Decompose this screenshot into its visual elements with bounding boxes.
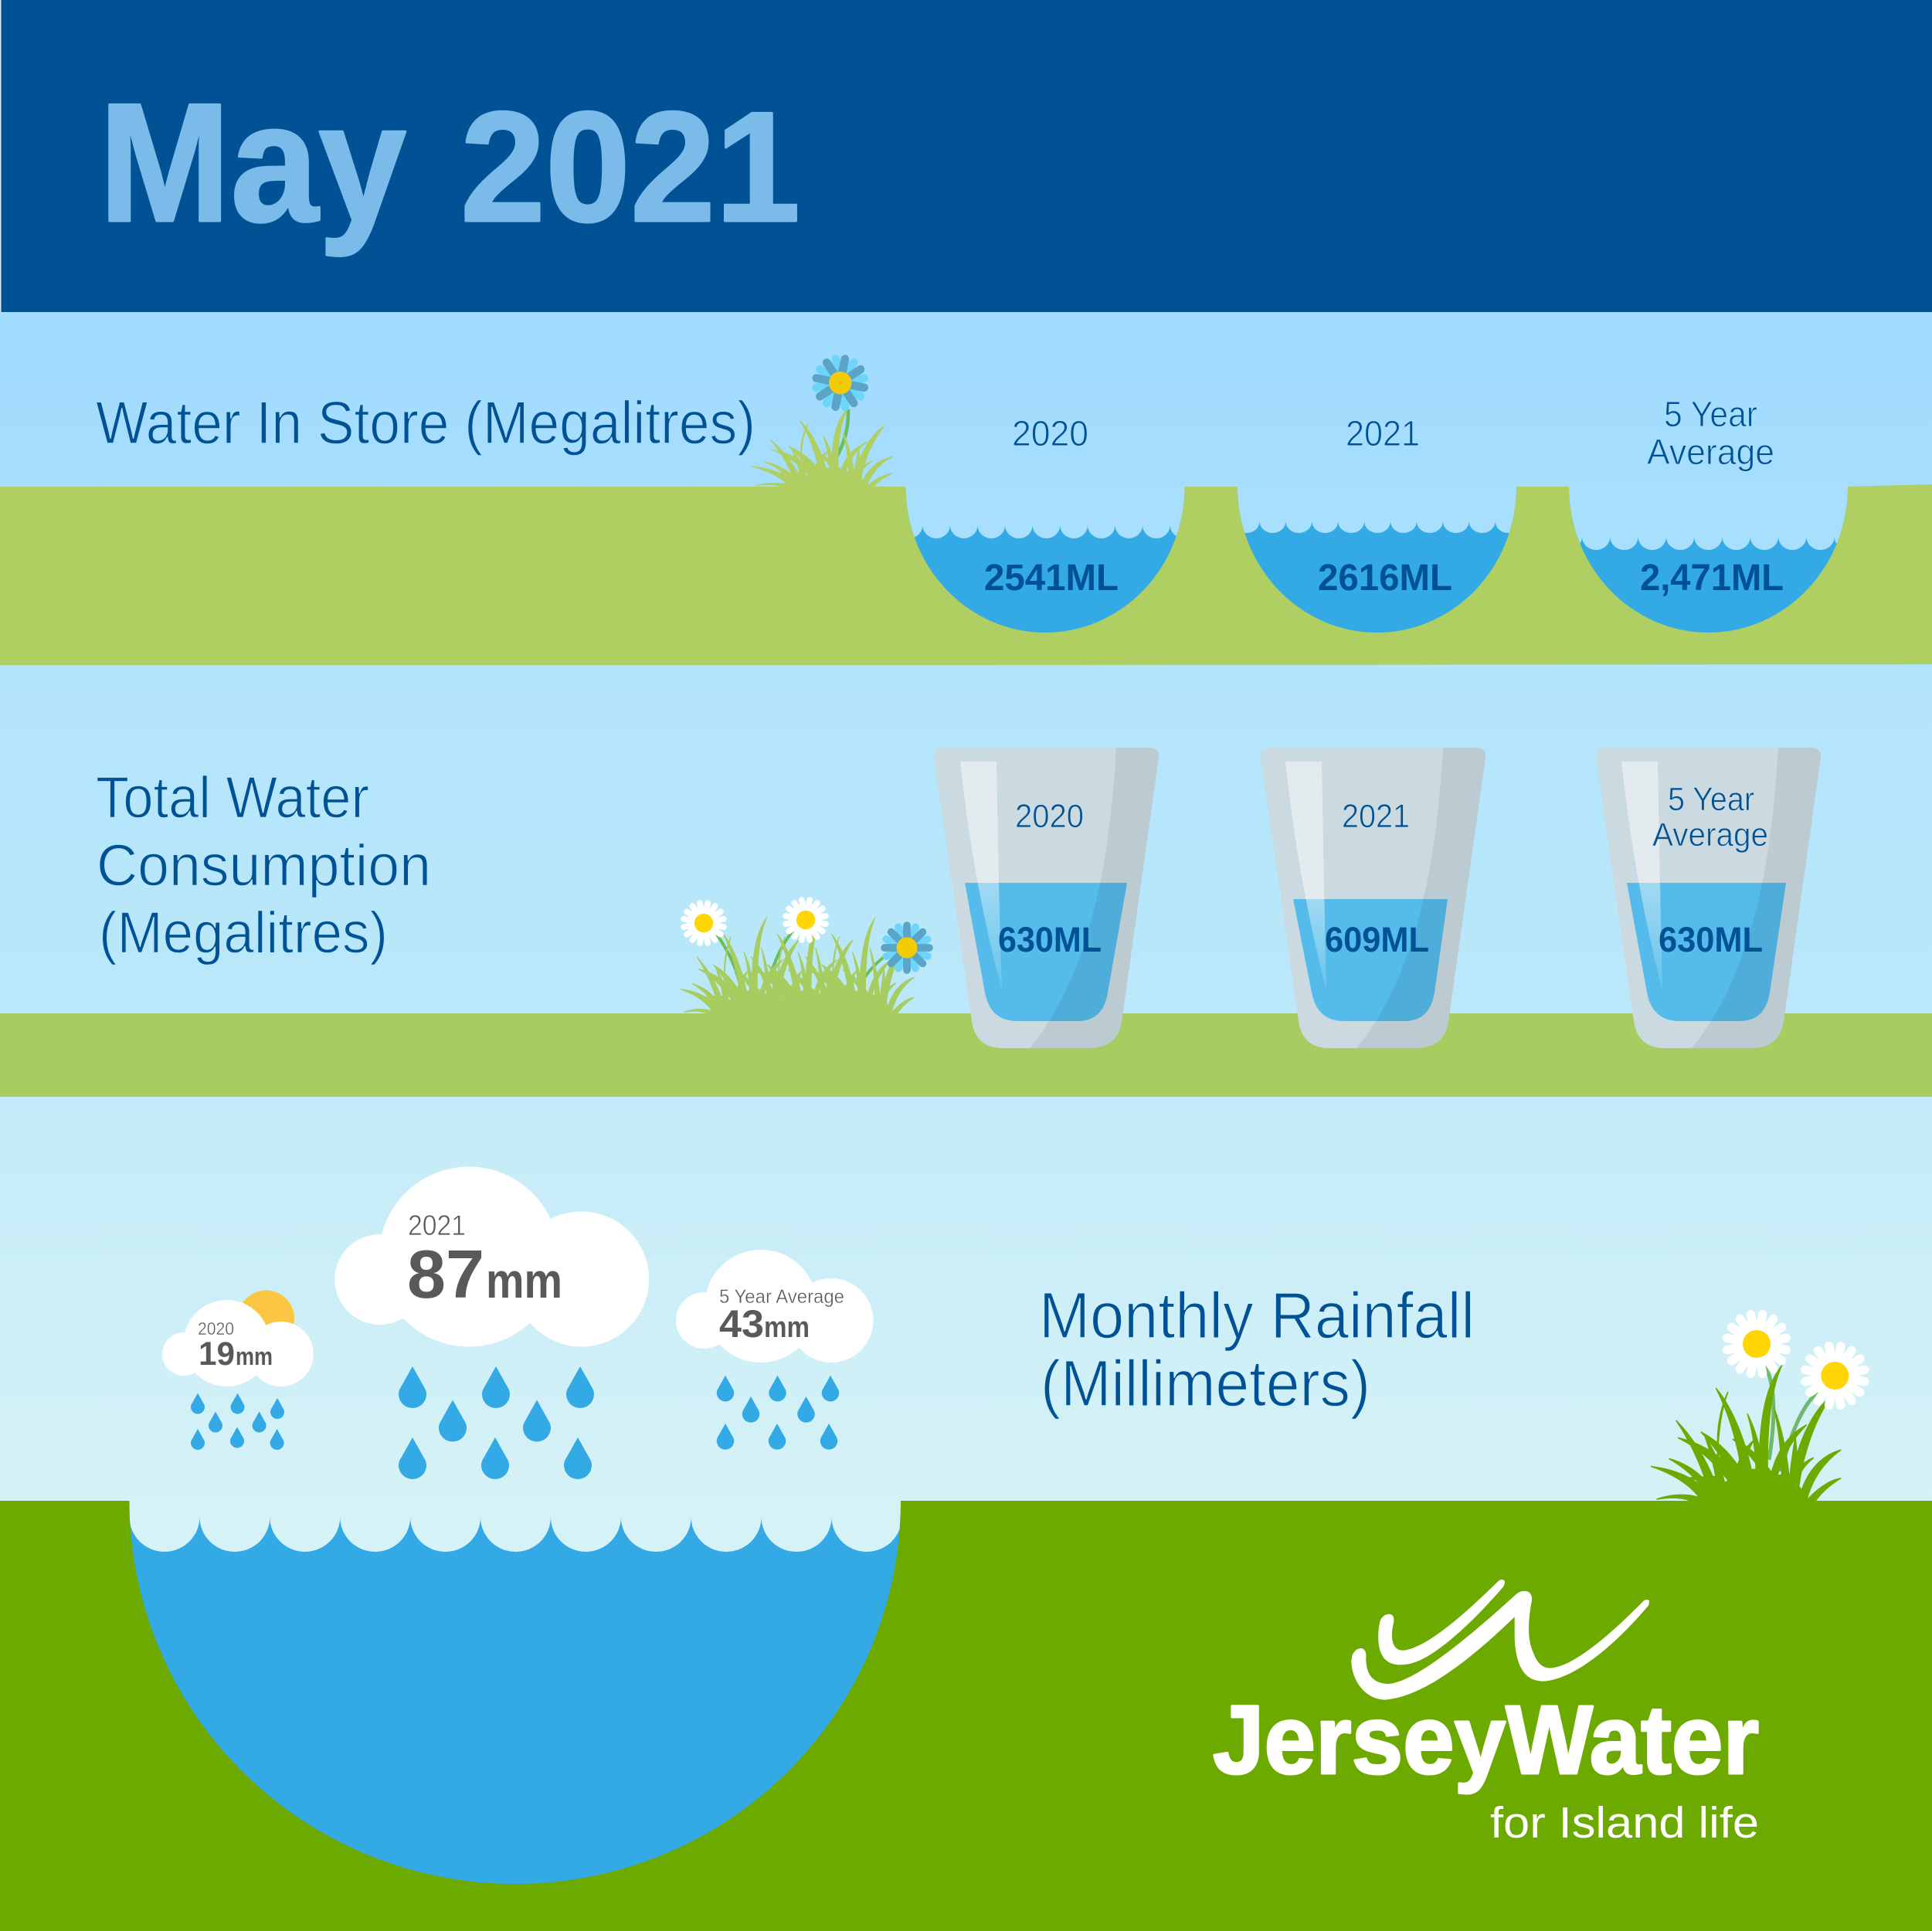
- rain drops 5 year average: [717, 1376, 839, 1450]
- panel: header: [0, 0, 1932, 312]
- glass 5 year average: [1596, 748, 1821, 1048]
- title: 2021: [460, 80, 800, 255]
- panel: total water consumption: [0, 665, 1932, 1098]
- reservoir 5 year average: Average: [1647, 432, 1774, 472]
- sky band: [0, 1097, 1932, 1502]
- reservoir 2021: [1238, 421, 1516, 633]
- glass 2021: 2021: [1342, 798, 1410, 835]
- ground: [0, 1501, 1932, 1931]
- heading: total water consumption: [96, 765, 431, 966]
- heading: monthly rainfall: (Millimeters): [1041, 1347, 1370, 1420]
- title: [99, 69, 800, 257]
- ground: [0, 1013, 1932, 1097]
- glass 2020: 2020: [1015, 798, 1084, 835]
- panel: monthly rainfall: [0, 1097, 1932, 1931]
- glass 2020: 630ML: [998, 920, 1102, 959]
- heading: monthly rainfall: Monthly Rainfall: [1039, 1279, 1475, 1352]
- heading: water in store: Water In Store (Megalitres): [96, 389, 755, 456]
- flowers and grass: [681, 900, 932, 1013]
- rain drops 2020: [191, 1393, 284, 1450]
- reservoir 2020: [905, 421, 1185, 633]
- icon: sun: [238, 1290, 294, 1347]
- reservoir 5 year average: [1569, 402, 1848, 633]
- wordmark: JerseyWater: [1213, 1685, 1759, 1794]
- reservoir: [130, 1501, 901, 1885]
- glass 5 year average: Average: [1652, 816, 1768, 854]
- cloud 5 year average: 43: [719, 1302, 764, 1346]
- cloud 5 year average: [676, 1250, 873, 1363]
- cloud 2020 with sun: [162, 1290, 314, 1386]
- reservoir 2020: 2541ML: [984, 558, 1119, 599]
- reservoir 2021: 2616ML: [1318, 558, 1452, 599]
- ground: [0, 484, 1932, 666]
- cloud 2021: 2021: [408, 1210, 466, 1241]
- glass 5 year average: 630ML: [1659, 920, 1763, 959]
- cloud 2020 with sun: 2020: [198, 1318, 234, 1339]
- reservoir 5 year average: 2,471ML: [1640, 558, 1784, 599]
- cloud 2021: 87: [407, 1236, 484, 1312]
- reservoir 2021: 2021: [1346, 413, 1420, 453]
- reservoir 5 year average: 5 Year: [1664, 394, 1757, 434]
- glass 2021: 609ML: [1325, 920, 1429, 959]
- reservoir 2020: 2020: [1012, 413, 1088, 453]
- tagline: for Island life: [1490, 1798, 1759, 1848]
- glass 2020: [934, 748, 1159, 1048]
- rain drops 2021: [399, 1366, 594, 1479]
- cloud 2021: mm: [486, 1253, 562, 1308]
- title: May: [99, 69, 406, 257]
- cloud 2020 with sun: mm: [236, 1342, 273, 1370]
- cloud 2020 with sun: 19: [199, 1335, 235, 1373]
- icon: cloud: [162, 1300, 314, 1386]
- panel: water in store: [0, 312, 1932, 667]
- flowers and grass: [1652, 1315, 1865, 1501]
- heading: total water consumption: (Megalitres): [99, 901, 388, 966]
- sky band: [0, 312, 1932, 667]
- heading: monthly rainfall: [1039, 1279, 1475, 1420]
- icon: wave mark: [1351, 1580, 1649, 1700]
- sky band: [0, 665, 1932, 1098]
- flower and grass: [752, 359, 892, 487]
- heading: total water consumption: Consumption: [97, 833, 431, 899]
- heading: total water consumption: Total Water: [96, 765, 369, 831]
- cloud 2021: [334, 1166, 649, 1347]
- logo: Jersey Water: [1213, 1580, 1759, 1848]
- cloud 5 year average: 5 Year Average: [719, 1286, 844, 1308]
- glass 5 year average: 5 Year: [1668, 781, 1754, 818]
- glass 2021: [1261, 748, 1486, 1048]
- cloud 5 year average: mm: [764, 1312, 810, 1344]
